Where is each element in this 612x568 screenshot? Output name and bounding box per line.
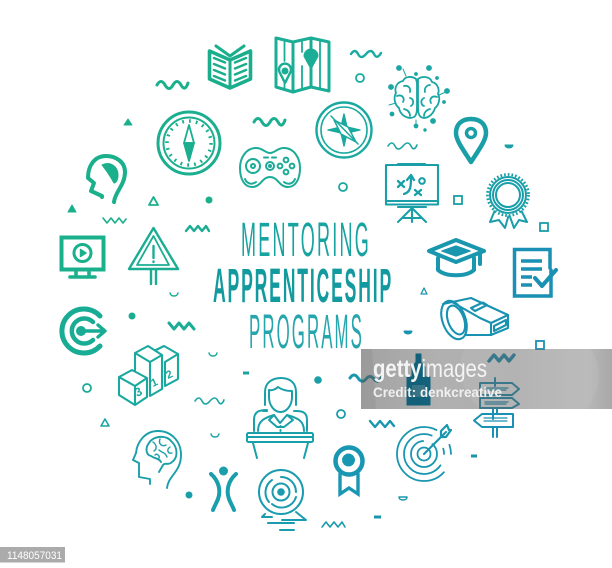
icon: brain with sparks <box>389 66 449 131</box>
icon: video monitor <box>62 238 104 277</box>
image id label <box>0 547 65 562</box>
icon: whistle <box>436 297 508 343</box>
icon: numbered podium: 3 <box>132 384 145 400</box>
icon: strategy board <box>386 164 438 222</box>
icon: game controller <box>240 148 300 187</box>
icon: folded map <box>276 38 329 92</box>
icon: numbered podium: 2 <box>164 368 175 382</box>
title <box>213 214 393 359</box>
icon: signpost <box>474 378 519 437</box>
icon: warning sign <box>129 228 178 284</box>
watermark banner <box>361 349 612 409</box>
icon: speaker at podium <box>247 378 313 458</box>
icon: numbered podium <box>119 346 178 405</box>
icon: open book <box>210 46 250 88</box>
icon: archery target <box>397 425 451 481</box>
infographic canvas: MENTORING <box>241 214 371 267</box>
icon: numbered podium: 1 <box>149 376 160 390</box>
icon: ribbon badge <box>336 448 362 494</box>
decoration: small shapes <box>68 51 548 527</box>
icon: head with brain <box>133 431 181 488</box>
squiggle crossing watermark <box>350 375 382 381</box>
infographic canvas: PROGRAMS <box>249 306 364 359</box>
icon: human figure <box>211 466 236 510</box>
icon: head profile <box>88 156 125 202</box>
watermark banner: Credit: denkcreative <box>373 385 502 400</box>
icon: checklist <box>514 250 556 296</box>
icon: safari compass <box>316 102 372 158</box>
icon: target with arrow <box>62 309 105 353</box>
icon: webcam <box>259 470 306 530</box>
zigzag crossing watermark <box>489 355 514 361</box>
watermark banner: gettyimages <box>373 355 487 383</box>
image id label: 1148057031 <box>7 550 62 562</box>
icon: award rosette <box>488 174 528 228</box>
icon: location pin <box>456 119 486 162</box>
icon: compass left <box>158 112 220 174</box>
icon: graduation cap <box>429 240 484 275</box>
icon: whistle bottle <box>407 354 430 405</box>
